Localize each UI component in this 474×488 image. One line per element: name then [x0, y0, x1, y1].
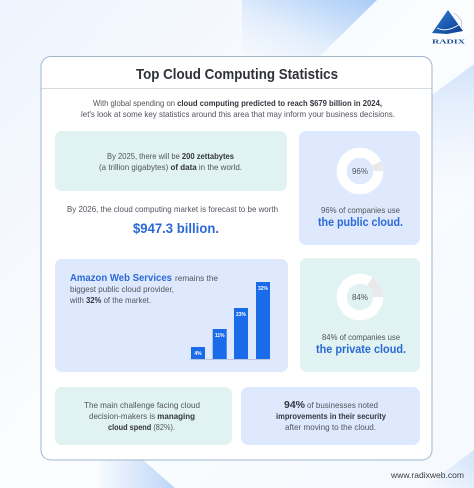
panel: AWS — [55, 259, 288, 372]
panel: cloud spend — [55, 387, 232, 445]
main card — [41, 56, 432, 460]
panel: public cloud — [299, 131, 420, 245]
donut chart: 96%: 96% — [352, 167, 368, 176]
text block: AWS: with 32% of the market. — [69, 295, 151, 305]
panel: cloud spend: cloud spend (82%). — [108, 422, 175, 432]
website url: www.radixweb.com — [390, 470, 464, 480]
title: Top Cloud Computing Statistics — [136, 66, 338, 83]
text block: AWS: biggest public cloud provider, — [70, 284, 174, 294]
intro text: With global spending on cloud computing predicted to reach $679 billion in 2024, — [93, 98, 382, 108]
bar chart: 23% — [236, 312, 247, 318]
panel: public cloud: 96% of companies use — [321, 205, 400, 215]
panel: public cloud: the public cloud. — [318, 217, 403, 229]
panel: security: improvements in their security — [276, 411, 386, 421]
panel: cloud spend: decision-makers is managing — [89, 411, 195, 421]
intro text — [81, 98, 395, 119]
text block: market forecast: By 2026, the cloud computing market is forecast to be worth — [67, 204, 278, 214]
bar chart: 32% — [258, 286, 269, 292]
panel: 200 zettabytes: By 2025, there will be 200 zettabytes — [107, 151, 234, 161]
logo: Radix: RADIX — [432, 38, 465, 46]
donut chart: 84%: 84% — [352, 293, 368, 302]
panel: security — [241, 387, 420, 445]
panel: 200 zettabytes: (a trillion gigabytes) of data in the world. — [99, 162, 242, 172]
text block: AWS: remains the — [175, 273, 218, 283]
text block: AWS — [69, 272, 218, 305]
panel: security: after moving to the cloud. — [285, 422, 376, 432]
panel: security: of businesses noted — [307, 400, 378, 410]
bar chart: 4% — [194, 351, 202, 357]
panel: security: 94% — [284, 399, 306, 411]
text block: market forecast: $947.3 billion. — [133, 220, 219, 236]
intro text: let's look at some key statistics around this area that may inform your business decisions. — [81, 109, 395, 119]
panel: private cloud: 84% of companies use — [322, 332, 400, 342]
logo: Radix — [432, 10, 465, 46]
panel: cloud spend: The main challenge facing cloud — [84, 400, 200, 410]
text block: market forecast — [67, 204, 278, 236]
bar chart: 11% — [215, 333, 225, 339]
panel: 200 zettabytes — [55, 131, 287, 191]
bar chart — [190, 282, 270, 360]
text block: AWS: Amazon Web Services — [70, 272, 172, 284]
panel: private cloud: the private cloud. — [316, 344, 406, 356]
panel: private cloud — [300, 258, 420, 372]
